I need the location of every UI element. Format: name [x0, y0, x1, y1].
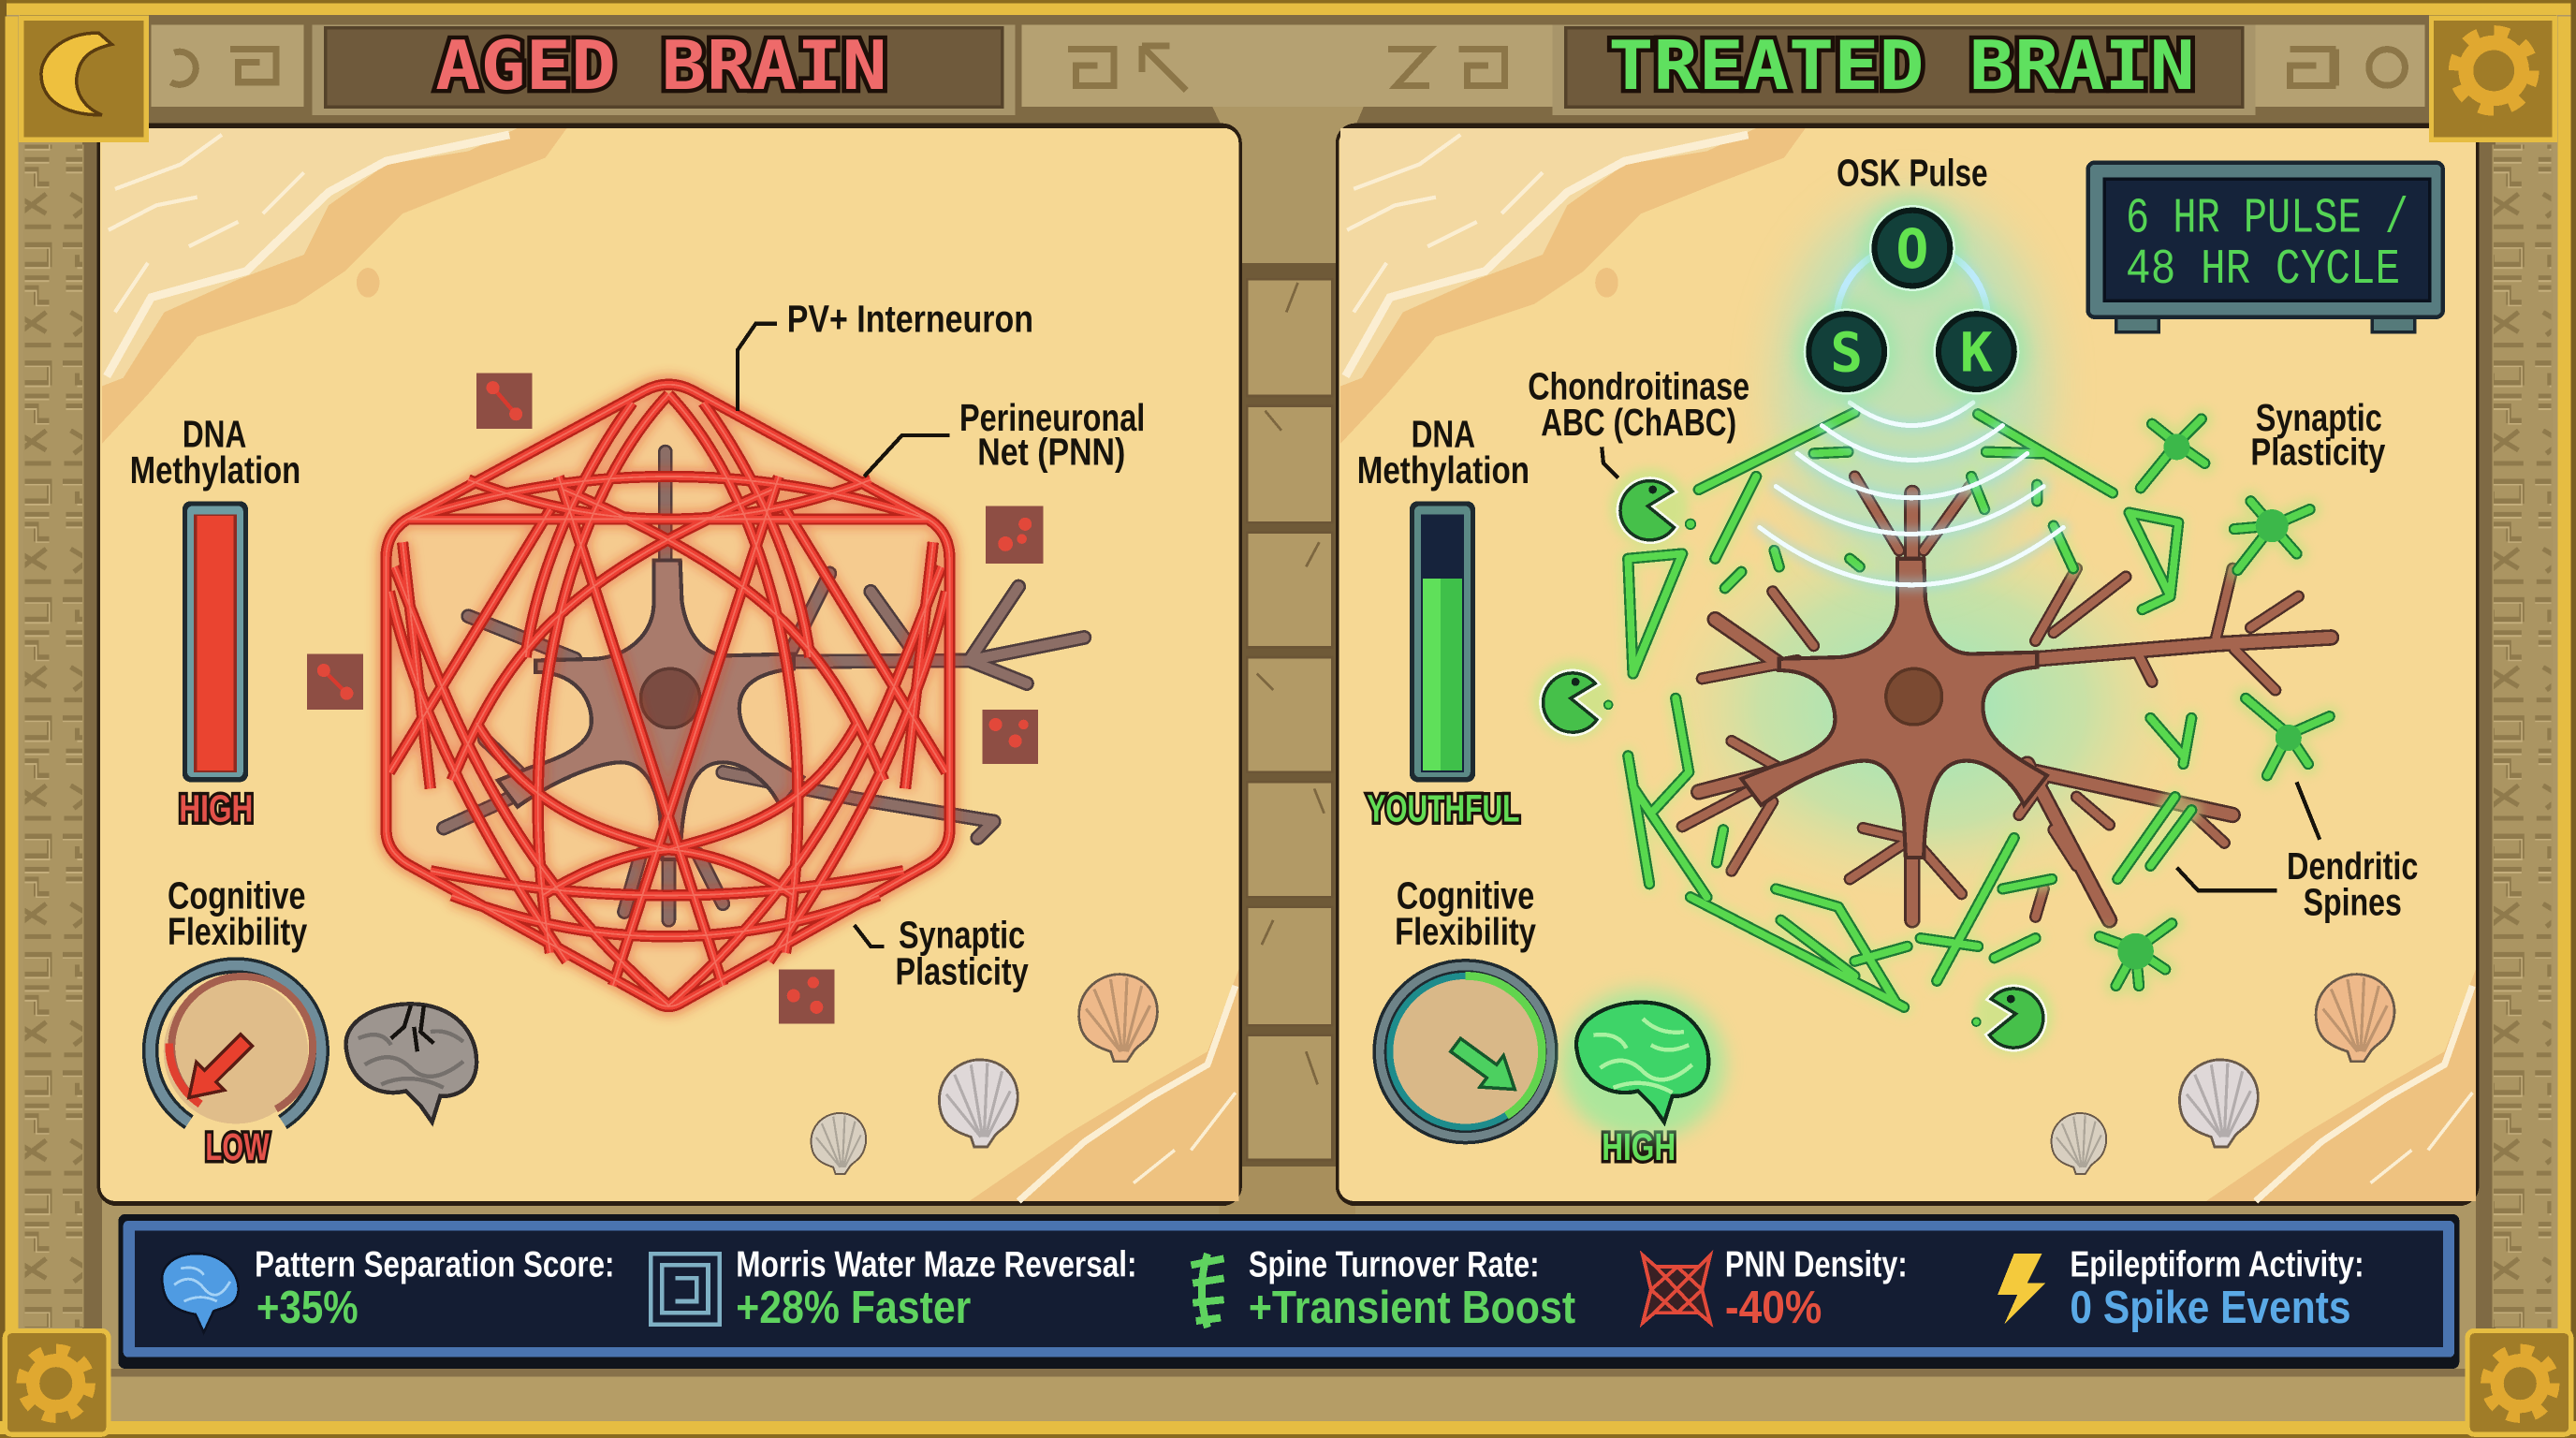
icon: net	[1643, 1255, 1710, 1323]
stat: spine turnover	[1191, 1245, 1575, 1333]
gauge: cognitive flexibility treated	[1380, 874, 1676, 1168]
gauge: cognitive flexibility aged: LOW	[205, 1125, 271, 1168]
corner tile: moon	[22, 18, 146, 139]
side glyph column left	[23, 144, 84, 1328]
degraded net fragments	[1628, 413, 2191, 1007]
OSK factors	[1797, 151, 2026, 401]
enzyme: chabc pacman 2	[1532, 661, 1613, 740]
meter: DNA methylation aged: Methylation	[130, 448, 300, 492]
OSK factors: K	[1960, 321, 1993, 385]
meter: DNA methylation aged: DNA	[183, 412, 246, 455]
beach bottom-right	[970, 969, 1238, 1201]
dendrites aged	[444, 452, 1084, 920]
icon: lightning	[1998, 1254, 2045, 1325]
teal neuron glow	[1660, 513, 2185, 901]
treated neuron and net	[1628, 198, 2331, 1007]
stat: spine turnover: +Transient Boost	[1249, 1283, 1575, 1333]
dendritic spines	[2100, 419, 2330, 986]
callouts: treated: Synaptic	[2256, 396, 2382, 439]
meter: DNA methylation treated: YOUTHFUL	[1367, 787, 1519, 830]
OSK factors: S	[1830, 321, 1863, 385]
heading plaque: aged brain	[313, 24, 1016, 115]
icon: green healthy brain	[1560, 990, 1725, 1140]
meter: DNA methylation aged: HIGH	[179, 787, 253, 830]
meter: DNA methylation treated: Methylation	[1357, 448, 1530, 492]
enzyme: chabc pacman 1	[1610, 468, 1695, 547]
stat: water maze: Morris Water Maze Reversal:	[736, 1245, 1137, 1285]
stat: pnn density: PNN Density:	[1725, 1245, 1908, 1285]
callouts: aged: Plasticity	[896, 949, 1029, 992]
molecule tiles	[307, 373, 1044, 1023]
stat: pnn density: -40%	[1725, 1283, 1822, 1333]
panel: aged brain	[97, 124, 1242, 1206]
perineuronal net	[386, 385, 949, 1006]
shells	[2052, 975, 2394, 1174]
stat: pattern separation	[162, 1245, 614, 1333]
shells	[812, 975, 1157, 1174]
beach top-left	[102, 128, 567, 444]
heading plaque: aged brain: AGED BRAIN	[435, 26, 887, 105]
callouts: treated: Chondroitinase	[1528, 364, 1749, 407]
beach top-left	[1340, 128, 1806, 444]
stat: pattern separation: +35%	[256, 1283, 359, 1333]
panel: treated brain	[1336, 124, 2479, 1206]
LCD timer	[2088, 163, 2443, 332]
callouts: aged: Perineuronal	[959, 396, 1145, 439]
gauge: cognitive flexibility aged: Flexibility	[168, 910, 308, 953]
stat: epileptiform: Epileptiform Activity:	[2070, 1245, 2364, 1285]
stat: epileptiform	[1998, 1245, 2364, 1333]
callouts: aged: PV+ Interneuron	[787, 298, 1033, 341]
stat: pattern separation: Pattern Separation Score:	[255, 1245, 614, 1285]
callouts: treated: ABC (ChABC)	[1541, 401, 1736, 444]
stats bar	[118, 1214, 2459, 1369]
stat: water maze	[651, 1245, 1137, 1333]
neuron in cage: aged	[386, 385, 1084, 1006]
gauge: cognitive flexibility treated: Cognitive	[1397, 874, 1534, 917]
LCD timer: 48 HR CYCLE	[2126, 242, 2400, 298]
gauge: cognitive flexibility treated: HIGH	[1602, 1125, 1676, 1168]
side glyph column right	[2492, 144, 2553, 1328]
gauge: cognitive flexibility aged	[151, 874, 321, 1168]
callouts: treated	[1528, 364, 2418, 924]
dendrites treated	[1682, 477, 2331, 920]
stat: epileptiform: 0 Spike Events	[2070, 1283, 2351, 1333]
stat: pnn density	[1643, 1245, 1908, 1333]
meter: DNA methylation aged	[130, 412, 300, 830]
heading plaque: treated brain: TREATED BRAIN	[1608, 26, 2195, 105]
icon: blue brain	[162, 1254, 239, 1332]
OSK factors: O	[1895, 217, 1928, 281]
gauge: cognitive flexibility treated: Flexibility	[1395, 910, 1536, 953]
pulse glow	[1778, 198, 2047, 575]
beach bottom-right	[2206, 969, 2476, 1201]
corner tile: gear bottom right	[2467, 1331, 2571, 1434]
icon: cracked grey brain	[346, 1004, 476, 1123]
icon: maze	[651, 1254, 720, 1325]
LCD timer: 6 HR PULSE /	[2126, 190, 2408, 246]
OSK pulse waves	[1760, 244, 2063, 585]
callouts: aged: Synaptic	[899, 914, 1025, 957]
gauge: cognitive flexibility aged: Cognitive	[168, 874, 305, 917]
callouts: treated: Plasticity	[2250, 431, 2386, 474]
OSK factors: OSK Pulse	[1837, 151, 1988, 194]
top carved tiles	[152, 24, 2424, 107]
icon: spine	[1191, 1254, 1224, 1328]
meter: DNA methylation treated: DNA	[1412, 412, 1475, 455]
corner tile: gear top right	[2431, 18, 2554, 139]
callouts: treated: Dendritic	[2287, 844, 2418, 888]
callouts: aged	[738, 298, 1145, 992]
enzyme: chabc pacman 3	[1972, 976, 2054, 1055]
stat: spine turnover: Spine Turnover Rate:	[1249, 1245, 1540, 1285]
callouts: treated: Spines	[2304, 881, 2402, 924]
callouts: aged: Net (PNN)	[977, 431, 1125, 474]
meter: DNA methylation treated	[1357, 412, 1530, 830]
stat: water maze: +28% Faster	[736, 1283, 971, 1333]
heading plaque: treated brain	[1553, 24, 2256, 115]
center stone column	[1212, 107, 1364, 1216]
corner tile: gear bottom left	[5, 1331, 109, 1434]
